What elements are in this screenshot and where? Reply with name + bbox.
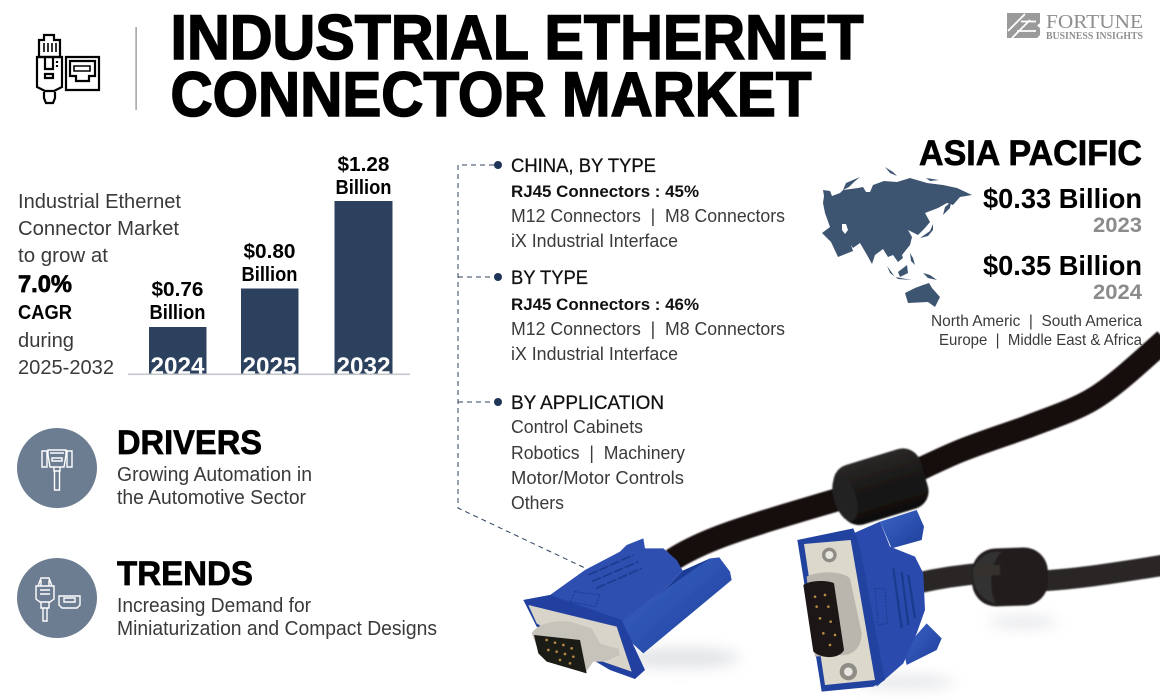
text: CAGR summary: 2025-2032 (18, 357, 114, 379)
text: CAGR summary: Connector Market (18, 218, 179, 240)
segment: by application (494, 393, 685, 513)
bar 2032: 2032 (336, 353, 390, 380)
heading: drivers: DRIVERS (117, 424, 262, 462)
panel: drivers (17, 424, 312, 509)
text: drivers description: Growing Automation in (117, 464, 312, 486)
segment: by application: Robotics | Machinery (511, 443, 685, 463)
segment: by type: BY TYPE (511, 268, 588, 289)
logo: Fortune Business Insights: FORTUNE (1046, 11, 1143, 33)
bar 2025: $0.80 (244, 241, 296, 263)
text: CAGR summary: during (18, 330, 74, 352)
segment: by type (494, 268, 785, 364)
bar 2032 (334, 154, 392, 380)
segment: by application: Control Cabinets (511, 417, 643, 437)
segment: China by type: M12 Connectors | M8 Connectors (511, 206, 785, 226)
text: drivers description (117, 464, 312, 509)
icon: USB plug and port in circle (17, 558, 97, 638)
bar 2032: $1.28 (338, 154, 390, 176)
cable: lower (918, 547, 1160, 607)
stat: 2023 (983, 183, 1142, 237)
segment: by application: Others (511, 493, 564, 513)
logo: Fortune Business Insights: BUSINESS INSIGHTS (1046, 31, 1143, 42)
connector: left blue VGA (523, 538, 732, 679)
stat: 2023: $0.33 Billion (983, 183, 1142, 214)
bar chart (128, 154, 410, 380)
text: CAGR summary (18, 191, 181, 379)
segment: by type: RJ45 Connectors : 46% (511, 295, 699, 314)
bar 2025: 2025 (242, 353, 296, 380)
bar 2024 (149, 279, 206, 380)
map: Asia Pacific (822, 167, 972, 307)
bar 2024: $0.76 (152, 279, 204, 301)
cable: upper (672, 340, 1160, 560)
text: other regions (931, 313, 1142, 349)
panel: Asia Pacific figures (919, 134, 1142, 349)
bar 2024: 2024 (150, 353, 205, 380)
icon: serial connector in circle (17, 428, 97, 508)
segment: by type: iX Industrial Interface (511, 344, 678, 364)
text: CAGR summary: CAGR (18, 302, 73, 324)
panel: trends (17, 555, 437, 640)
segment: China by type (494, 156, 785, 251)
text: trends description: Increasing Demand for (117, 595, 311, 617)
text: trends description (117, 595, 437, 640)
segment: by application: Motor/Motor Controls (511, 468, 684, 488)
stat: 2024: $0.35 Billion (983, 250, 1142, 281)
bar 2025: Billion (242, 264, 298, 286)
text: CAGR summary: Industrial Ethernet (18, 191, 181, 213)
stat: 2024: 2024 (1093, 281, 1142, 304)
title: INDUSTRIAL ETHERNET (170, 3, 864, 73)
bar 2025 (241, 241, 298, 380)
text: CAGR summary: 7.0% (18, 271, 72, 298)
icon: ethernet plug and socket (37, 35, 99, 103)
connector lines: dashed leader (458, 165, 585, 568)
segment: China by type: iX Industrial Interface (511, 231, 678, 251)
text: drivers description: the Automotive Sector (117, 487, 306, 509)
Caspian Sea (842, 224, 848, 234)
text: other regions: North Americ | South America (931, 313, 1142, 330)
panel: Asia Pacific figures: ASIA PACIFIC (919, 134, 1142, 173)
text: other regions: Europe | Middle East & Africa (939, 332, 1142, 349)
text: CAGR summary: to grow at (18, 245, 108, 267)
connector: right blue VGA (797, 510, 942, 692)
stat: 2023: 2023 (1093, 214, 1142, 237)
segment: by type: M12 Connectors | M8 Connectors (511, 319, 785, 339)
text: trends description: Miniaturization and Compact Designs (117, 618, 437, 640)
segment: China by type: CHINA, BY TYPE (511, 156, 656, 177)
segment: by application: BY APPLICATION (511, 393, 664, 414)
title: CONNECTOR MARKET (170, 60, 812, 130)
heading: trends: TRENDS (117, 555, 253, 593)
bar 2032: Billion (336, 177, 392, 199)
bar 2024: Billion (150, 302, 206, 324)
logo: Fortune Business Insights (1007, 11, 1143, 42)
title (170, 3, 864, 130)
stat: 2024 (983, 250, 1142, 304)
photo: VGA cables and connectors (523, 340, 1160, 692)
shadows (620, 617, 1058, 688)
segment: China by type: RJ45 Connectors : 45% (511, 182, 699, 201)
